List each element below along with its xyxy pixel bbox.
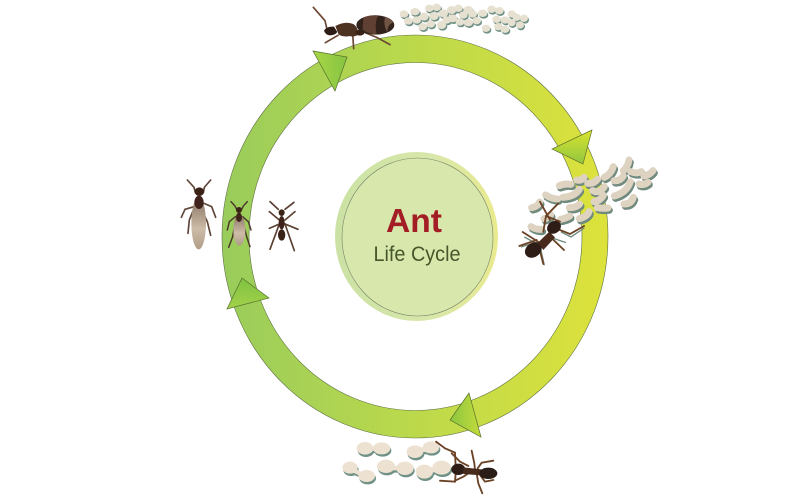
worker ant: single [269,202,298,251]
arrowhead: bottom [450,393,481,437]
cycle ring [222,35,608,438]
pupae [342,441,452,484]
subtitle: Life Cycle: Life Cycle [374,243,460,266]
title: Ant: Ant [386,202,442,239]
eggs: top [400,4,529,35]
queen ant [313,7,394,49]
worker ant with larvae [519,202,584,265]
arrowhead: left [227,278,269,309]
larvae [531,160,654,232]
winged ant: large [181,180,216,249]
worker ant with pupae [436,442,497,493]
centre disc [335,152,498,321]
arrowhead: right [552,130,592,164]
winged ant: small [227,202,251,247]
arrowhead: top [313,51,347,91]
